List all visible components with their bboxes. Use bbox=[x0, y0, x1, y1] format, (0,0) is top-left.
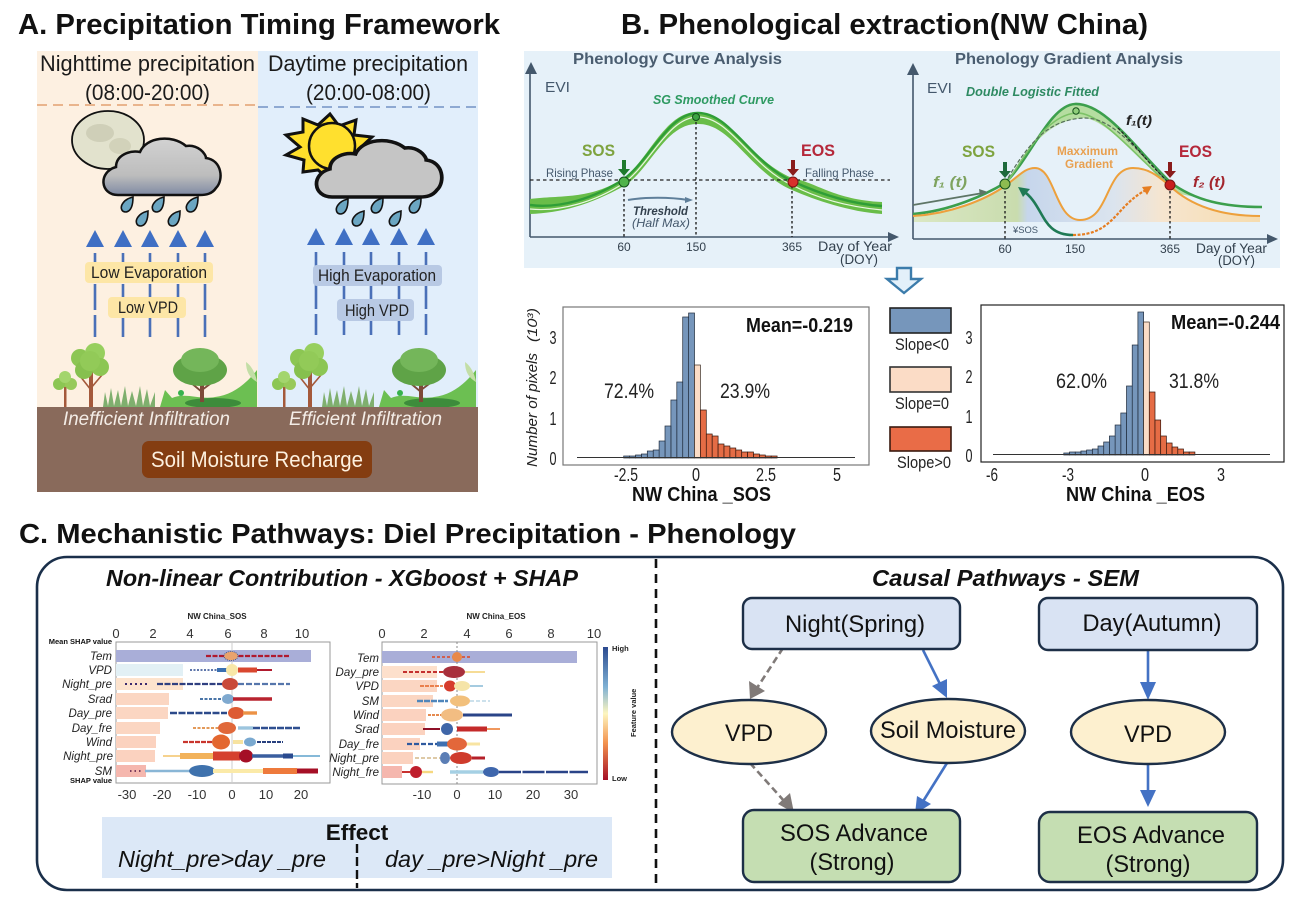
panel B: phenology schematics background bbox=[524, 51, 1280, 268]
vegetation day bbox=[272, 343, 476, 408]
legend: slope classes: Slope<0 bbox=[895, 335, 949, 354]
icon: rain cloud day bbox=[316, 141, 442, 197]
feature labels: Day_pre bbox=[336, 667, 379, 679]
axis labels: 0 bbox=[550, 449, 556, 469]
axis labels bbox=[966, 328, 1225, 485]
chart: phenology curve analysis bbox=[525, 51, 899, 267]
heading A: A. Precipitation Timing Framework bbox=[18, 9, 500, 41]
percent negative: 72.4% bbox=[604, 380, 654, 403]
bottom axis ticks bbox=[118, 787, 308, 802]
top axis ticks: 8 bbox=[260, 626, 268, 641]
axis labels: 3 bbox=[550, 328, 556, 348]
label: low evaporation: Low Evaporation bbox=[91, 264, 207, 282]
gradient labels: f₁ (t) bbox=[933, 174, 967, 191]
x axis title: NW China _SOS bbox=[632, 484, 771, 506]
feature labels: Wind bbox=[353, 710, 380, 722]
mean SHAP bars bbox=[116, 650, 311, 777]
bars: positive slope bbox=[700, 410, 777, 458]
feature labels bbox=[62, 651, 113, 778]
top axis ticks: 0 bbox=[112, 626, 120, 641]
curve labels: Rising Phase bbox=[546, 166, 613, 180]
feature labels: Day_fre bbox=[72, 723, 112, 735]
axis labels: 2.5 bbox=[756, 465, 776, 485]
shaded gradient area bbox=[913, 168, 1260, 222]
gradient labels: Day of Year bbox=[1196, 240, 1267, 256]
axis labels: 2 bbox=[550, 368, 556, 388]
icon: raindrops day bbox=[336, 198, 421, 226]
gradient labels: Double Logistic Fitted bbox=[966, 85, 1099, 99]
bottom axis ticks: -10 bbox=[188, 787, 206, 802]
mean SHAP bars bbox=[382, 651, 577, 778]
SOS marker: SOS bbox=[962, 142, 995, 161]
legend: slope classes bbox=[890, 308, 951, 472]
chart title: Phenology Curve Analysis bbox=[573, 51, 782, 68]
bars: positive slope bbox=[1149, 392, 1195, 455]
axis labels: 0 bbox=[692, 465, 700, 485]
chart: SHAP NW China EOS bbox=[329, 612, 638, 802]
feature labels: Night_pre bbox=[62, 679, 112, 691]
label: soil moisture recharge: Soil Moisture Recharge bbox=[151, 447, 363, 472]
bottom axis ticks: 0 bbox=[453, 787, 461, 802]
colour bar: feature value: High bbox=[612, 644, 629, 653]
icon: rain cloud night bbox=[103, 139, 221, 195]
top axis ticks: 4 bbox=[463, 626, 471, 641]
node: SOS Advance: (Strong) bbox=[810, 849, 894, 876]
percent positive: 31.8% bbox=[1169, 370, 1219, 393]
heading: non-linear contribution: Non-linear Contribution - XGboost + SHAP bbox=[106, 565, 578, 591]
feature labels: Srad bbox=[88, 694, 113, 706]
curve labels: (DOY) bbox=[840, 252, 878, 267]
y axis unit: (10³) bbox=[524, 308, 540, 342]
bottom axis ticks: 20 bbox=[294, 787, 308, 802]
colour bar: feature value bbox=[603, 644, 638, 783]
panel A: precipitation timing framework bbox=[37, 51, 478, 492]
node: EOS Advance: (Strong) bbox=[1106, 851, 1190, 878]
soil ground bbox=[37, 407, 478, 492]
gradient labels: 150 bbox=[1065, 242, 1085, 256]
axis captions: SHAP value bbox=[70, 776, 112, 785]
axis labels: 2 bbox=[966, 367, 972, 387]
axis captions: Mean SHAP value bbox=[49, 637, 112, 646]
gradient labels: Maxximum bbox=[1057, 144, 1118, 158]
feature labels: Night_fre bbox=[332, 767, 379, 779]
bottom axis ticks: -30 bbox=[118, 787, 136, 802]
vegetation night bbox=[53, 343, 257, 408]
label: soil moisture recharge bbox=[142, 441, 372, 478]
background: daytime side bbox=[258, 51, 478, 408]
bottom axis ticks: -20 bbox=[153, 787, 171, 802]
top axis ticks: 6 bbox=[505, 626, 513, 641]
node: VPD bbox=[672, 700, 826, 764]
axis labels: 1 bbox=[966, 407, 972, 427]
label: low VPD: Low VPD bbox=[118, 299, 178, 317]
gradient labels: (DOY) bbox=[1218, 253, 1255, 268]
beeswarm points bbox=[125, 652, 320, 777]
node: SOS Advance: SOS Advance bbox=[780, 820, 928, 847]
feature labels: VPD bbox=[88, 665, 112, 677]
top axis ticks bbox=[112, 626, 309, 641]
chart: phenology curve analysis: EVI bbox=[545, 79, 570, 96]
arrow: night to VPD dashed bbox=[749, 648, 783, 699]
bottom axis ticks: 30 bbox=[564, 787, 578, 802]
axis labels: 5 bbox=[833, 465, 841, 485]
double logistic curve bbox=[913, 104, 1262, 214]
chart: SHAP NW China SOS bbox=[49, 612, 330, 802]
curve labels: 365 bbox=[782, 240, 802, 254]
feature labels bbox=[329, 653, 380, 779]
effect box: Night_pre>day _pre bbox=[118, 846, 326, 872]
curve labels: Threshold bbox=[633, 204, 689, 218]
curve labels: SG Smoothed Curve bbox=[653, 92, 774, 107]
top axis ticks bbox=[378, 626, 601, 641]
axis labels: -2.5 bbox=[614, 465, 638, 485]
legend: slope classes: Slope>0 bbox=[897, 453, 951, 472]
arrow: VPD to EOS bbox=[1140, 765, 1156, 807]
curve labels bbox=[546, 92, 892, 267]
legend: slope classes: Slope=0 bbox=[895, 394, 949, 413]
node: Soil Moisture: Soil Moisture bbox=[880, 717, 1016, 744]
y axis title: Number of pixels bbox=[524, 352, 541, 467]
heading: daytime precipitation: Daytime precipitation bbox=[268, 51, 468, 76]
bottom axis ticks: 10 bbox=[488, 787, 502, 802]
arrow: schematic to histograms bbox=[887, 268, 921, 293]
arrow: night to soil moisture bbox=[923, 650, 947, 698]
top axis ticks: 2 bbox=[420, 626, 428, 641]
feature labels: Srad bbox=[355, 724, 380, 736]
feature labels: Night_pre bbox=[329, 753, 379, 765]
bar: zero slope bbox=[694, 365, 700, 458]
bottom axis ticks: 20 bbox=[526, 787, 540, 802]
gradient labels: ¥SOS bbox=[1012, 225, 1038, 235]
SEM diagram: night spring pathway bbox=[672, 598, 1025, 882]
icon: sun bbox=[286, 114, 372, 180]
heading B: B. Phenological extraction(NW China) bbox=[621, 9, 1148, 41]
feature labels: SM bbox=[362, 696, 379, 708]
curve labels: Falling Phase bbox=[805, 166, 874, 180]
chart title: Phenology Gradient Analysis bbox=[955, 51, 1183, 68]
arrows: night upward moisture bbox=[86, 230, 214, 337]
node: Night(Spring): Night(Spring) bbox=[785, 611, 925, 638]
bar: zero slope bbox=[1144, 322, 1149, 455]
axis labels: -6 bbox=[986, 465, 998, 485]
EOS marker bbox=[787, 141, 835, 187]
icon: moon bbox=[72, 111, 144, 169]
node: Day(Autumn) bbox=[1039, 598, 1257, 650]
axis labels: 0 bbox=[1141, 465, 1149, 485]
feature labels: Tem bbox=[357, 653, 379, 665]
gradient labels bbox=[933, 85, 1267, 268]
chart: SHAP NW China SOS: NW China_SOS bbox=[187, 612, 247, 621]
curve labels: 150 bbox=[686, 240, 706, 254]
chart: EOS histogram bbox=[966, 305, 1284, 506]
top axis ticks: 10 bbox=[295, 626, 309, 641]
bars: negative slope bbox=[624, 313, 694, 458]
SOS marker bbox=[582, 141, 630, 187]
effect box bbox=[102, 817, 612, 888]
curve labels: (Half Max) bbox=[632, 216, 690, 230]
feature labels: Night_pre bbox=[63, 751, 113, 763]
node: Night(Spring) bbox=[743, 598, 960, 649]
bottom axis ticks bbox=[413, 787, 578, 802]
arrow: VPD to SOS dashed bbox=[750, 763, 794, 813]
heading C: C. Mechanistic Pathways: Diel Precipitation - Phenology bbox=[19, 518, 796, 549]
gradient curve bbox=[913, 168, 1260, 220]
top axis ticks: 10 bbox=[587, 626, 601, 641]
node: VPD: VPD bbox=[725, 720, 773, 747]
top axis ticks: 2 bbox=[149, 626, 157, 641]
percent positive: 23.9% bbox=[720, 380, 770, 403]
time range: nighttime: (08:00-20:00) bbox=[85, 80, 210, 105]
feature labels: Day_fre bbox=[339, 739, 379, 751]
EOS marker: EOS bbox=[1179, 142, 1212, 161]
axis labels: 1 bbox=[550, 409, 556, 429]
gradient arrows bbox=[913, 186, 1152, 235]
text: inefficient infiltration: Inefficient Infiltration bbox=[63, 408, 230, 430]
gradient labels: 365 bbox=[1160, 242, 1180, 256]
gradient labels: f₁(t) bbox=[1126, 112, 1152, 128]
text: efficient infiltration: Efficient Infiltration bbox=[289, 408, 442, 430]
feature labels: SM bbox=[95, 766, 112, 778]
EOS marker: EOS bbox=[801, 141, 835, 160]
SOS marker bbox=[962, 142, 1011, 189]
chart: SOS histogram bbox=[524, 307, 869, 506]
background: nighttime side bbox=[37, 51, 258, 408]
gradient labels: f₂ (t) bbox=[1193, 174, 1225, 191]
top axis ticks: 4 bbox=[186, 626, 194, 641]
node: VPD: VPD bbox=[1124, 721, 1172, 748]
SG smoothed curve bbox=[530, 112, 882, 214]
SOS marker: SOS bbox=[582, 141, 615, 160]
time range: daytime: (20:00-08:00) bbox=[306, 80, 431, 105]
top axis ticks: 6 bbox=[224, 626, 232, 641]
axis labels: -3 bbox=[1062, 465, 1074, 485]
curve labels: Day of Year bbox=[818, 238, 892, 254]
feature labels: Tem bbox=[90, 651, 112, 663]
chart: SHAP NW China EOS: NW China_EOS bbox=[466, 612, 526, 621]
bottom axis ticks: 10 bbox=[259, 787, 273, 802]
mean value: Mean=-0.219 bbox=[746, 315, 853, 337]
beeswarm points bbox=[402, 652, 588, 778]
feature labels: Wind bbox=[86, 737, 113, 749]
top axis ticks: 0 bbox=[378, 626, 386, 641]
label: high evaporation: High Evaporation bbox=[318, 267, 436, 285]
node: SOS Advance bbox=[743, 810, 960, 882]
mean value: Mean=-0.244 bbox=[1171, 312, 1281, 334]
feature labels: VPD bbox=[355, 681, 379, 693]
axis labels: 3 bbox=[966, 328, 972, 348]
curve labels: 60 bbox=[617, 240, 631, 254]
percent negative: 62.0% bbox=[1056, 370, 1107, 393]
colour bar: feature value: Feature value bbox=[629, 689, 638, 737]
arrow: day to VPD bbox=[1140, 650, 1156, 700]
EOS marker bbox=[1164, 142, 1212, 190]
node: EOS Advance: EOS Advance bbox=[1077, 822, 1225, 849]
feature labels: Day_pre bbox=[69, 708, 112, 720]
chart: phenology gradient analysis: EVI bbox=[927, 80, 952, 97]
top axis ticks: 8 bbox=[547, 626, 555, 641]
arrows: day upward moisture bbox=[307, 228, 435, 335]
heading: nighttime precipitation: Nighttime precipitation bbox=[40, 51, 255, 76]
node: Soil Moisture bbox=[871, 699, 1025, 763]
node: VPD bbox=[1071, 700, 1225, 764]
icon: raindrops night bbox=[121, 197, 198, 226]
effect box: day _pre>Night _pre bbox=[385, 846, 598, 872]
bottom axis ticks: 0 bbox=[228, 787, 236, 802]
colour bar: feature value: Low bbox=[612, 774, 627, 783]
node: EOS Advance bbox=[1039, 812, 1257, 882]
axis labels: 0 bbox=[966, 446, 972, 466]
x axis title: NW China _EOS bbox=[1066, 484, 1205, 506]
gradient labels: 60 bbox=[998, 242, 1012, 256]
bars: negative slope bbox=[1064, 312, 1144, 455]
bottom axis ticks: -10 bbox=[413, 787, 431, 802]
gradient labels: Gradient bbox=[1065, 157, 1113, 171]
axis labels bbox=[550, 328, 841, 485]
SEM diagram: day autumn pathway bbox=[1039, 598, 1257, 882]
panel C: outline bbox=[37, 557, 1283, 890]
heading: causal pathways: Causal Pathways - SEM bbox=[872, 565, 1140, 591]
effect box: Effect bbox=[326, 820, 389, 845]
label: high VPD: High VPD bbox=[345, 302, 409, 320]
axis labels: 3 bbox=[1217, 465, 1225, 485]
node: Day(Autumn): Day(Autumn) bbox=[1082, 610, 1222, 637]
arrow: soil moisture to SOS bbox=[915, 763, 947, 814]
axis captions bbox=[49, 637, 112, 785]
chart: phenology gradient analysis bbox=[907, 51, 1278, 268]
